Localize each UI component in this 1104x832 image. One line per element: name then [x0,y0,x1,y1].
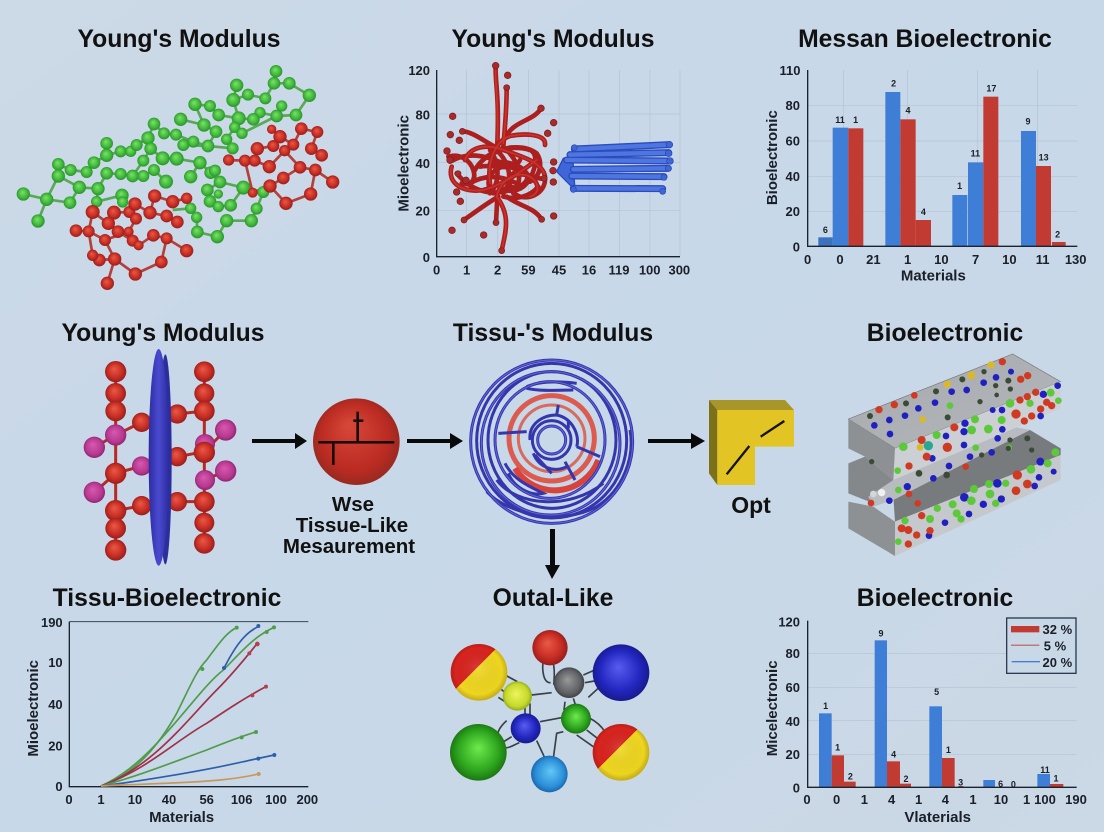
x axis title: Materials [149,809,214,826]
title: middle left: Young's Modulus [62,320,264,347]
axis labels: 60 [786,680,800,695]
value labels: 9 [878,628,883,638]
axis labels: 130 [1065,252,1086,267]
axis labels [780,63,1086,267]
blue bars [819,640,1050,787]
value labels: 1 [823,701,828,711]
caption: measurement: Mesaurement [283,535,415,558]
axis labels: 60 [786,133,800,148]
axis labels [778,614,1087,807]
y axis labels: 0 [423,250,430,265]
arrow: spiral down to molecule [545,529,560,579]
sphere: light blue [531,756,568,792]
y axis title: Mioelectronic [395,115,412,212]
value labels: 4 [921,207,926,217]
value labels: 1 [853,115,858,125]
axis labels: 1 [904,252,911,267]
value labels: 6 [823,225,828,235]
axes [808,70,1077,246]
value labels: 2 [891,79,896,89]
x axis title: Materials [901,267,966,284]
sphere: small blue [511,713,541,743]
y axis title: Micelectronic [764,660,781,756]
x axis labels: 300 [668,262,690,277]
axis labels: 4 [942,792,950,807]
x axis labels [433,262,690,277]
axis labels: 1 [1023,792,1030,807]
legend: 32 % [1043,622,1073,637]
axis labels: 4 [888,792,896,807]
axis labels: 100 [1034,792,1056,807]
axis labels: 80 [786,646,800,661]
sphere: green [450,724,507,781]
axis labels: 1 [97,792,105,807]
bar chart: lower right with legend [764,614,1087,826]
arrow: molecule to sphere [252,433,307,449]
axes [69,620,308,623]
value labels [823,79,1060,239]
arrow: spiral to block [648,433,705,449]
line chart: Tissu-Bioelectronic [25,615,318,826]
title: middle centre: Tissu-'s Modulus [453,320,653,347]
sphere: small green [561,704,591,734]
axis labels: 56 [199,792,214,807]
value labels: 17 [986,83,996,93]
axis labels: 1 [861,792,868,807]
title: top left: Young's Modulus [78,26,280,53]
red bars [848,97,1066,246]
axis labels: 7 [972,252,979,267]
value labels: 0 [1011,779,1016,789]
value labels: 1 [957,181,962,191]
axis labels: 40 [48,697,63,712]
legend [1007,618,1076,673]
middle slab [848,427,1061,522]
axis labels: 110 [780,63,800,78]
axis labels: 0 [793,780,800,795]
axis labels: 0 [65,792,73,807]
axis labels: 10 [994,792,1008,807]
x axis labels: 100 [639,262,660,277]
axis labels: 1 [915,792,922,807]
value labels: 1 [835,743,840,753]
axis labels: 120 [778,614,800,629]
x axis labels: 45 [552,262,566,277]
axis labels: 10 [48,655,63,670]
value labels: 4 [891,750,896,760]
axis labels: 21 [866,252,881,267]
sphere: red yellow lower right [593,724,649,781]
x axis labels: 119 [609,262,629,277]
axis labels: 0 [55,779,63,794]
x axis labels: 16 [582,262,596,277]
value labels: 2 [848,772,853,782]
x axis labels: 0 [433,262,440,277]
icon: red measurement sphere [313,398,400,485]
sphere: blue [593,644,649,701]
value labels: 11 [835,115,845,125]
title: middle right: Bioelectronic [867,320,1023,347]
title: top right: Messan Bioelectronic [798,26,1052,53]
axis labels: 0 [804,252,811,267]
bottom slab [848,455,1061,556]
caption: measurement: Tissue-Like [296,514,408,537]
axis labels: 0 [803,792,811,807]
value labels: 11 [1040,765,1050,775]
title: bottom left: Tissu-Bioelectronic [53,585,281,612]
axis labels: 20 [786,204,800,219]
molecule: red and magenta atoms around blue ring [84,349,236,566]
title: bottom centre: Outal-Like [493,585,613,612]
axis labels: 10 [128,792,142,807]
arrow: sphere to spiral [407,433,463,449]
value labels: 5 [934,687,939,697]
axis labels: 10 [1002,252,1017,267]
axis labels: 40 [786,169,800,184]
caption: Opt: Opt [731,492,771,518]
value labels: 9 [1025,117,1030,127]
axes [808,621,1077,787]
blue aligned chains [557,145,670,190]
curve markers [200,624,276,776]
title: bottom right: Bioelectronic [857,585,1013,612]
axis labels: 80 [786,98,800,113]
bar chart: Messan Bioelectronic [764,63,1086,284]
curves [101,627,274,786]
sphere: red [532,630,568,665]
value labels: 1 [1053,774,1058,784]
axis labels: 1 [969,792,977,807]
axis labels: 190 [41,615,63,630]
value labels: 6 [998,779,1003,789]
molecule: green and red ball-and-stick polymer [17,65,339,290]
axis labels: 11 [1036,252,1050,267]
axis labels: 40 [162,792,176,807]
blue bars [818,92,1036,246]
x axis title: Vlaterials [904,809,971,826]
red tangled chains [448,66,545,251]
axis labels: 106 [231,792,253,807]
y axis labels: 120 [408,63,430,78]
axes [437,70,680,257]
axis labels: 100 [265,792,287,807]
x axis labels: 2 [494,262,501,277]
value labels: 1 [946,745,951,755]
axis labels: 0 [833,792,840,807]
x axis labels: 1 [463,262,470,277]
value labels: 4 [905,106,910,116]
axis labels: 190 [1065,792,1087,807]
y axis title: Bioelectronic [764,110,781,205]
axis labels: 200 [296,792,318,807]
y axis labels [408,63,430,265]
value labels: 2 [1055,229,1060,239]
icon: grey layered composite blocks with particles [848,354,1062,556]
axis labels: 40 [786,714,800,729]
axis labels: 20 [786,747,800,762]
molecule: coloured spheres with bonds [450,630,649,792]
legend: 5 % [1044,638,1067,653]
axis labels: 0 [793,239,800,254]
axis labels: 10 [934,252,949,267]
legend: 20 % [1043,655,1073,670]
sphere: grey [554,667,584,698]
y axis title: Mioelectronic [25,660,42,757]
sphere: yellow green [503,681,532,711]
y axis labels: 40 [416,156,430,171]
axis labels [41,615,318,807]
value labels: 2 [903,774,908,784]
axis labels: 20 [48,738,63,753]
value labels: 13 [1039,153,1049,163]
caption: measurement [283,493,415,558]
top slab [848,354,1061,480]
y axis labels: 80 [416,107,430,122]
chart: tangled and aligned polymer chains [395,62,690,277]
x axis labels: 59 [521,262,536,277]
axis labels: 0 [836,252,844,267]
value labels: 3 [958,778,963,788]
value labels: 11 [971,149,980,159]
red bars [832,755,1063,787]
y axis labels: 20 [416,203,430,218]
icon: blue and red spiral coil [471,360,633,523]
blue ring [149,349,172,566]
value labels [823,628,1058,789]
sphere: red yellow upper left [451,644,507,701]
title: top centre: Young's Modulus [452,26,654,53]
icon: yellow L block [709,400,794,485]
caption: measurement: Wse [332,493,374,516]
